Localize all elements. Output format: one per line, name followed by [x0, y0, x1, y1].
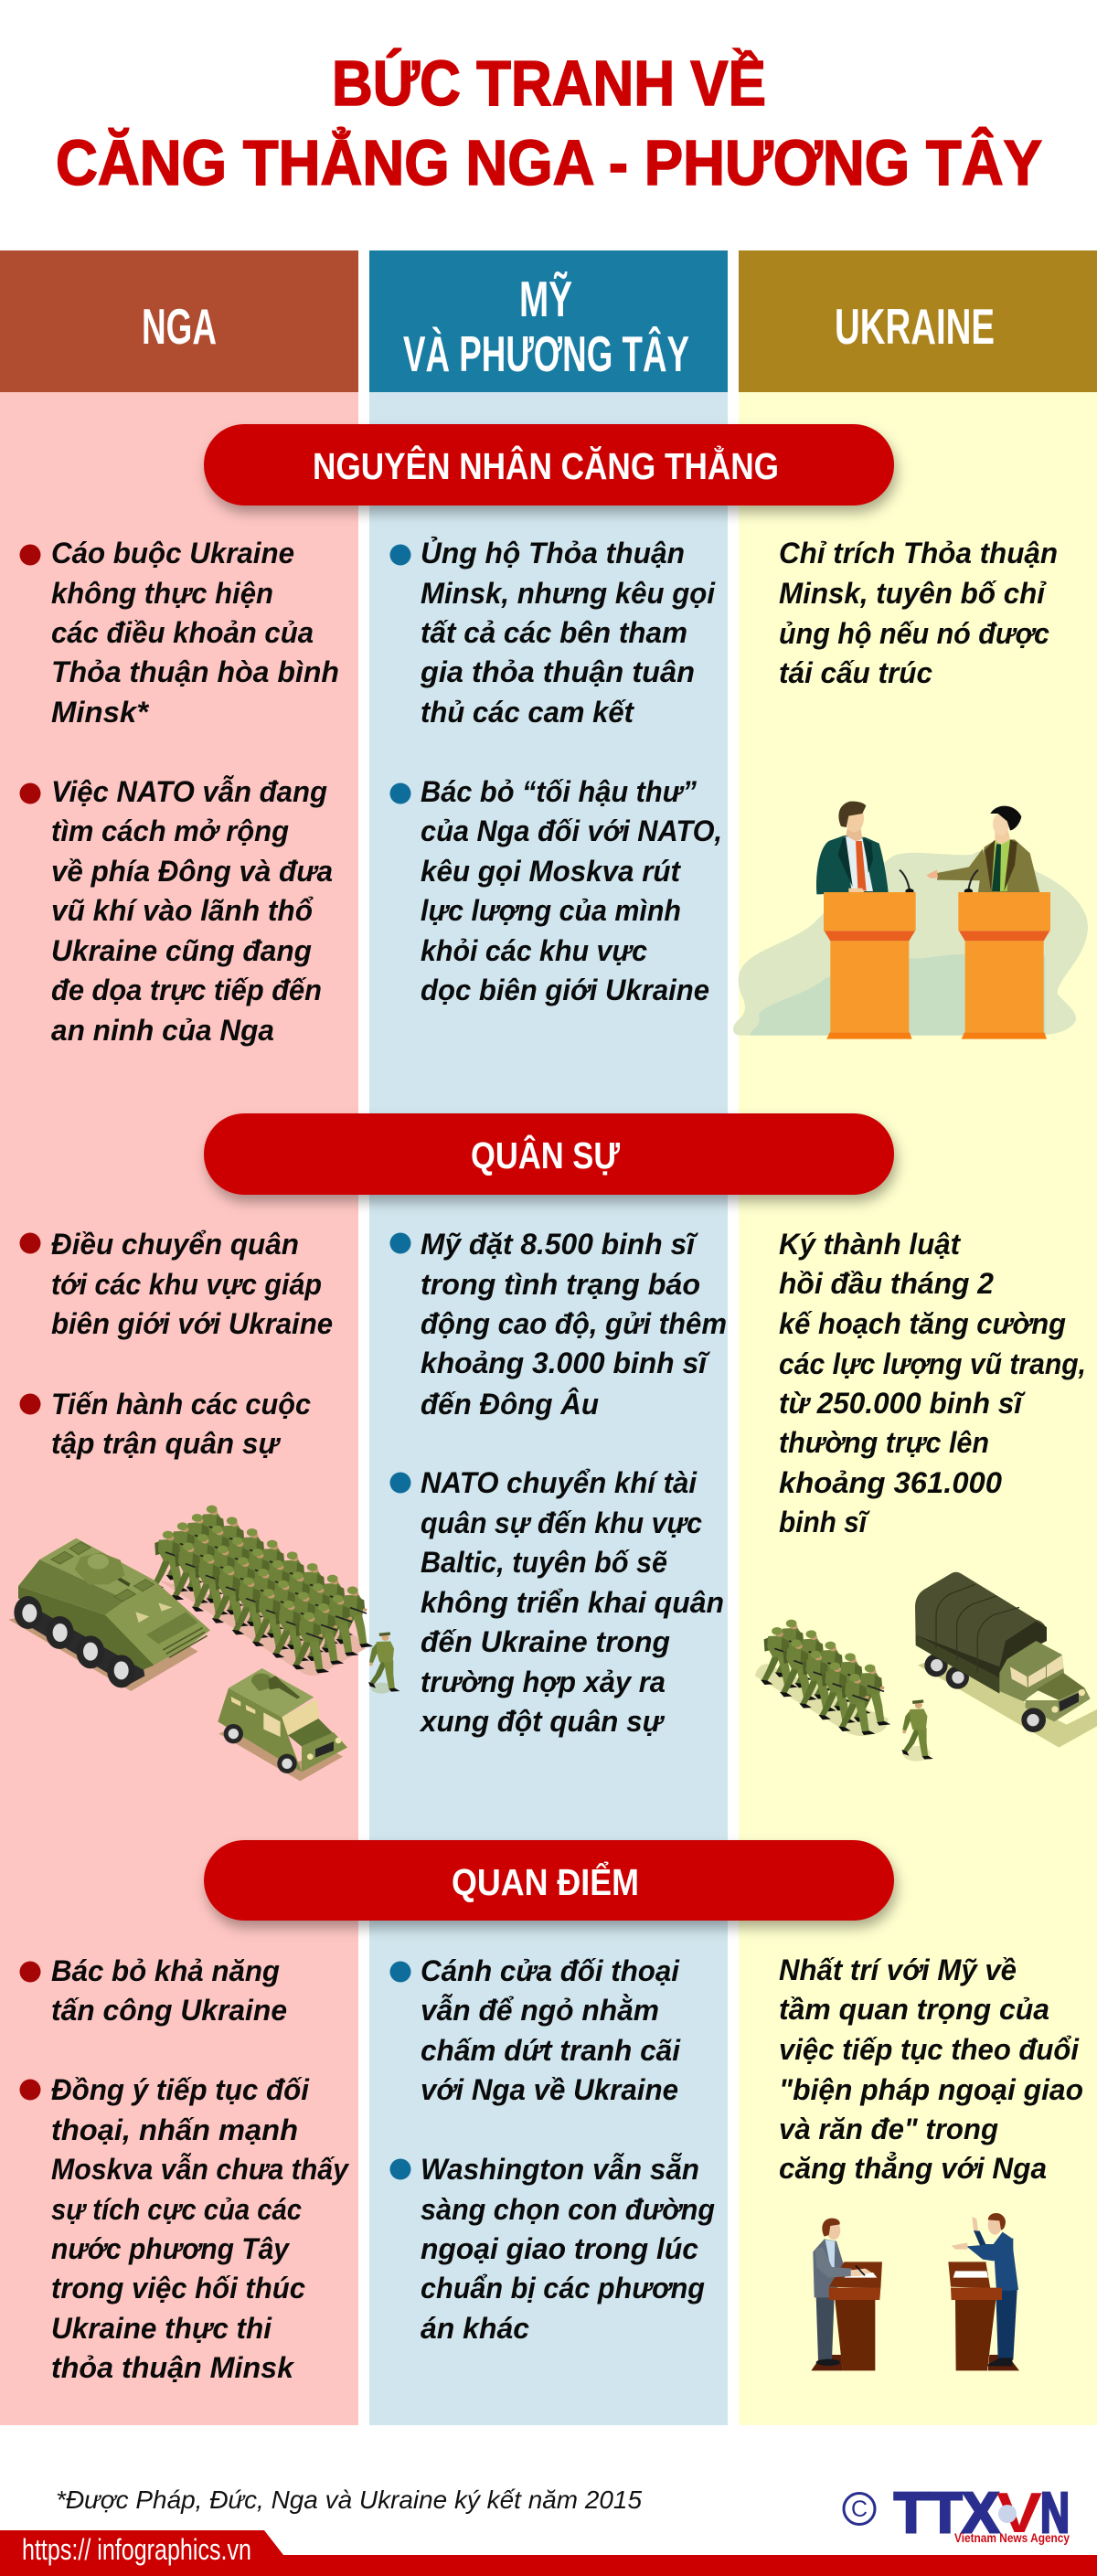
- text: Mỹ nguyên nhân: [389, 537, 722, 1006]
- text: Nga nguyên nhân: không thực hiện: [51, 577, 273, 610]
- text: Nga nguyên nhân: Thỏa thuận hòa bình: [51, 655, 339, 688]
- text: Ukraine quan điểm: [779, 1953, 1083, 2185]
- text: Nga quân sự: tập trận quân sự: [51, 1427, 282, 1460]
- text: Mỹ quân sự: xung đột quân sự: [419, 1705, 666, 1738]
- text: Mỹ quân sự: NATO chuyển khí tài: [421, 1466, 698, 1499]
- text: Ukraine nguyên nhân: [779, 537, 1058, 689]
- text: Mỹ quan điểm: ngoại giao trong lúc: [421, 2232, 698, 2265]
- text: Mỹ nguyên nhân: lực lượng của mình: [421, 894, 681, 927]
- column: Ukraine: [739, 250, 1097, 2425]
- text: Mỹ nguyên nhân: gia thỏa thuận tuân: [420, 655, 695, 688]
- footer bar with url: [0, 2530, 1097, 2576]
- text: Nga quan điểm: Moskva vẫn chưa thấy: [51, 2153, 350, 2186]
- illustration: two diplomats at lecterns: [811, 2213, 1019, 2370]
- text: Mỹ quân sự: Mỹ đặt 8.500 binh sĩ: [421, 1228, 698, 1261]
- text: Nga quân sự: tới các khu vực giáp: [51, 1268, 322, 1301]
- text: Mỹ nguyên nhân: dọc biên giới Ukraine: [421, 974, 709, 1006]
- text: Mỹ quân sự: quân sự đến khu vực: [421, 1506, 702, 1539]
- title: BỨC TRANH VỀ: [332, 48, 766, 119]
- text: Mỹ quân sự: trong tình trạng báo: [421, 1268, 700, 1301]
- column: Nga: [0, 250, 358, 2425]
- text: Mỹ nguyên nhân: khỏi các khu vực: [421, 934, 647, 967]
- text: Ukraine quân sự: các lực lượng vũ trang,: [779, 1347, 1086, 1380]
- text: Ukraine nguyên nhân: Chỉ trích Thỏa thuận: [779, 537, 1058, 569]
- column: Ukraine: UKRAINE: [835, 298, 995, 355]
- text: Nga quân sự: Điều chuyển quân: [51, 1228, 299, 1261]
- section banner: nguyên nhân: NGUYÊN NHÂN CĂNG THẲNG: [313, 444, 779, 487]
- text: Nga nguyên nhân: an ninh của Nga: [51, 1014, 274, 1047]
- logo: TTXVN: [844, 2482, 1070, 2545]
- section banner: quan điểm: [204, 1840, 894, 1921]
- text: Mỹ quân sự: động cao độ, gửi thêm: [421, 1307, 727, 1340]
- logo: TTXVN: TTX: [894, 2482, 999, 2545]
- text: Ukraine nguyên nhân: ủng hộ nếu nó được: [779, 617, 1049, 650]
- text: Nga quan điểm: Bác bỏ khả năng: [51, 1954, 280, 1987]
- text: Mỹ nguyên nhân: của Nga đối với NATO,: [421, 814, 722, 847]
- text: Nga nguyên nhân: đe dọa trực tiếp đến: [51, 974, 322, 1006]
- text: Nga quan điểm: Đồng ý tiếp tục đối: [51, 2073, 310, 2106]
- text: Mỹ quan điểm: chuẩn bị các phương: [421, 2272, 705, 2305]
- section banner: quân sự: QUÂN SỰ: [471, 1134, 621, 1176]
- text: Mỹ quan điểm: chấm dứt tranh cãi: [421, 2034, 681, 2067]
- text: Ukraine quân sự: [779, 1228, 1086, 1538]
- text: Mỹ quan điểm: Cánh cửa đối thoại: [421, 1954, 680, 1987]
- text: Ukraine nguyên nhân: tái cấu trúc: [779, 656, 932, 689]
- icon: officer walking: [368, 1632, 399, 1694]
- illustration: two speakers at orange podiums: [733, 802, 1088, 1039]
- text: Mỹ nguyên nhân: tất cả các bên tham: [421, 616, 687, 649]
- illustration: Ukrainian troops and truck: [755, 1572, 1097, 1762]
- text: Mỹ quân sự: [389, 1228, 727, 1738]
- column: Mỹ và phương Tây: MỸ: [519, 271, 572, 327]
- text: Ukraine quan điểm: việc tiếp tục theo đuổi: [779, 2033, 1080, 2066]
- text: Mỹ quan điểm: [389, 1954, 715, 2345]
- text: Ukraine nguyên nhân: Minsk, tuyên bố chỉ: [779, 577, 1047, 610]
- text: Mỹ nguyên nhân: Minsk, nhưng kêu gọi: [421, 577, 716, 610]
- text: Mỹ nguyên nhân: kêu gọi Moskva rút: [421, 855, 681, 888]
- text: Ukraine quân sự: Ký thành luật: [779, 1228, 961, 1261]
- section banner: quân sự: [204, 1113, 894, 1195]
- text: Nga quân sự: Tiến hành các cuộc: [51, 1388, 311, 1421]
- text: Nga nguyên nhân: Việc NATO vẫn đang: [51, 775, 327, 808]
- text: Ukraine quan điểm: và răn đe" trong: [779, 2113, 998, 2145]
- text: Mỹ nguyên nhân: thủ các cam kết: [421, 696, 634, 729]
- text: Ukraine quân sự: binh sĩ: [779, 1506, 870, 1538]
- text: Ukraine quan điểm: tầm quan trọng của: [779, 1993, 1049, 2026]
- text: Mỹ quan điểm: vẫn để ngỏ nhằm: [421, 1994, 659, 2027]
- text: Nga quan điểm: nước phương Tây: [51, 2232, 291, 2265]
- illustration: armored vehicle, marching troops and jeep: [8, 1506, 373, 1781]
- section banner: quan điểm: QUAN ĐIỂM: [452, 1860, 639, 1903]
- text: Nga nguyên nhân: về phía Đông và đưa: [51, 855, 333, 888]
- logo: TTXVN: N: [1040, 2482, 1070, 2545]
- text: Ukraine quan điểm: căng thẳng với Nga: [779, 2152, 1047, 2185]
- text: Ukraine quân sự: từ 250.000 binh sĩ: [779, 1387, 1026, 1420]
- text: Nga quan điểm: [20, 1954, 350, 2384]
- text: Mỹ quan điểm: Washington vẫn sẵn: [421, 2153, 699, 2186]
- text: Nga nguyên nhân: Ukraine cũng đang: [51, 934, 312, 967]
- footnote: *Được Pháp, Đức, Nga và Ukraine ký kết năm 2015: [56, 2486, 642, 2514]
- text: Mỹ quân sự: đến Ukraine trong: [421, 1625, 670, 1658]
- text: Mỹ quan điểm: án khác: [421, 2312, 529, 2345]
- text: Mỹ quan điểm: với Nga về Ukraine: [421, 2073, 678, 2106]
- text: Nga quan điểm: trong việc hối thúc: [51, 2272, 305, 2305]
- text: Nga quan điểm: thỏa thuận Minsk: [51, 2351, 295, 2384]
- section banner: nguyên nhân: [204, 424, 894, 506]
- text: Nga nguyên nhân: [20, 537, 339, 1047]
- column: Mỹ và phương Tây: VÀ PHƯƠNG TÂY: [403, 325, 689, 382]
- text: Nga quan điểm: tấn công Ukraine: [51, 1994, 287, 2027]
- text: Nga quan điểm: thoại, nhấn mạnh: [51, 2113, 298, 2146]
- text: Mỹ quân sự: khoảng 3.000 binh sĩ: [421, 1347, 710, 1379]
- text: Ukraine quân sự: thường trực lên: [779, 1426, 989, 1459]
- text: Mỹ quân sự: Baltic, tuyên bố sẽ: [421, 1546, 667, 1579]
- text: Ukraine quân sự: khoảng 361.000: [779, 1466, 1002, 1499]
- text: Nga nguyên nhân: Minsk*: [51, 696, 150, 729]
- title: [56, 48, 1042, 198]
- text: Nga nguyên nhân: tìm cách mở rộng: [51, 814, 289, 847]
- text: Nga nguyên nhân: vũ khí vào lãnh thổ: [51, 894, 314, 927]
- text: Ukraine quân sự: hồi đầu tháng 2: [779, 1267, 994, 1300]
- logo: TTXVN: C: [851, 2496, 868, 2522]
- column: Nga: NGA: [142, 298, 217, 355]
- logo: TTXVN: V: [996, 2482, 1042, 2545]
- logo: TTXVN: Vietnam News Agency: [954, 2530, 1070, 2545]
- text: Nga quân sự: biên giới với Ukraine: [51, 1307, 333, 1340]
- text: Nga quan điểm: sự tích cực của các: [51, 2193, 302, 2226]
- column: Mỹ và phương Tây: [369, 250, 728, 2425]
- text: Mỹ nguyên nhân: Ủng hộ Thỏa thuận: [421, 537, 685, 569]
- text: Mỹ quân sự: đến Đông Âu: [421, 1388, 599, 1421]
- text: Mỹ quân sự: không triển khai quân: [421, 1586, 724, 1619]
- text: Nga nguyên nhân: Cáo buộc Ukraine: [51, 537, 294, 569]
- text: Mỹ nguyên nhân: Bác bỏ “tối hậu thư”: [421, 775, 697, 808]
- text: Nga quan điểm: Ukraine thực thi: [51, 2312, 272, 2345]
- text: Mỹ quan điểm: sàng chọn con đường: [421, 2193, 715, 2226]
- text: Mỹ quân sự: trường hợp xảy ra: [421, 1666, 666, 1698]
- text: Nga quân sự: [20, 1228, 333, 1460]
- text: Ukraine quan điểm: "biện pháp ngoại giao: [779, 2073, 1083, 2106]
- text: Ukraine quân sự: kế hoạch tăng cường: [779, 1307, 1066, 1340]
- footer bar with url: https:// infographics.vn: [22, 2533, 251, 2566]
- text: Ukraine quan điểm: Nhất trí với Mỹ về: [779, 1953, 1017, 1986]
- text: Nga nguyên nhân: các điều khoản của: [51, 616, 314, 649]
